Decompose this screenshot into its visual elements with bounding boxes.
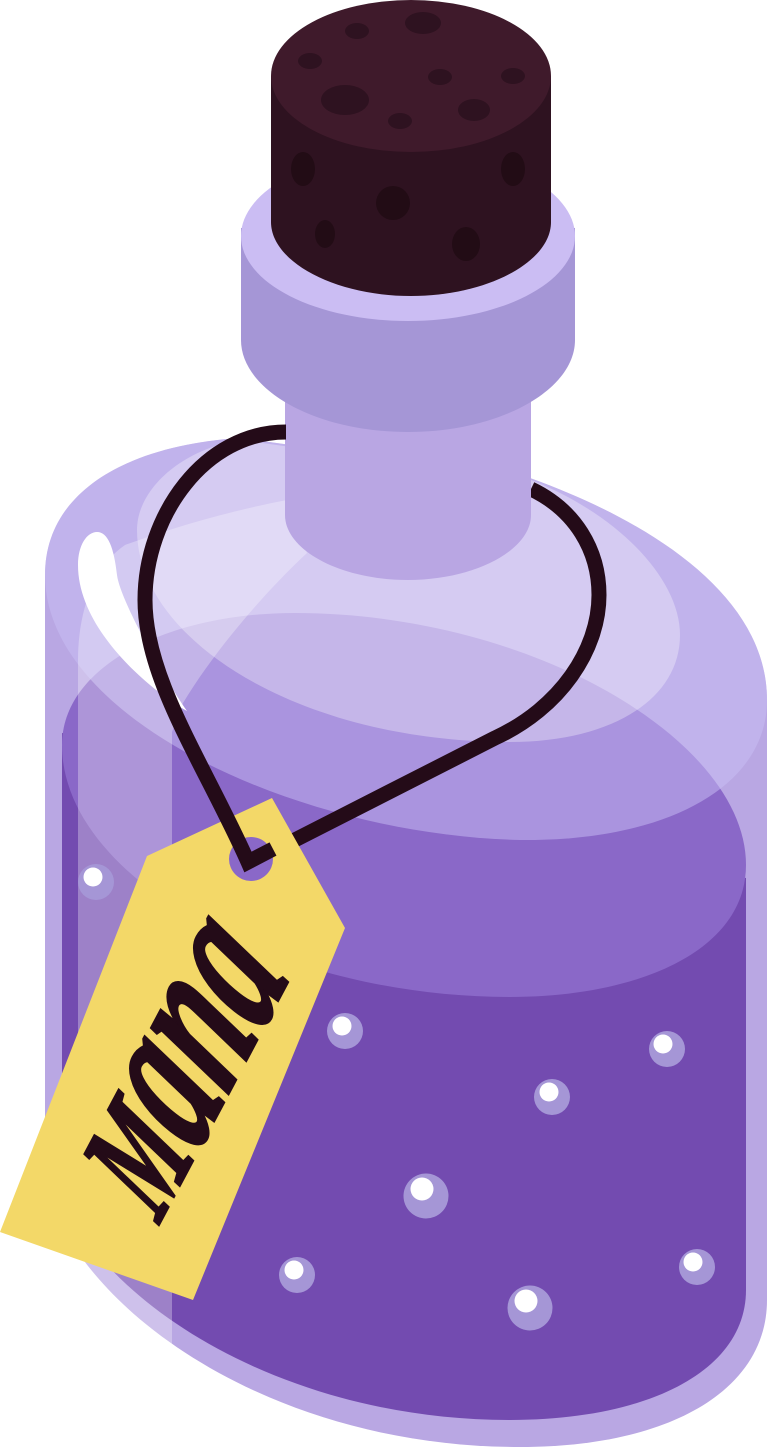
- vertical glass reflection: [78, 500, 307, 1400]
- bottle shoulder top surface: [45, 438, 767, 840]
- bubbles: [78, 864, 715, 1330]
- bottle neck: [285, 390, 531, 580]
- cork stopper: [271, 0, 551, 296]
- liquid surface: [62, 613, 746, 997]
- string: right section behind tag: [285, 489, 599, 845]
- stopper collar: [241, 151, 575, 432]
- inner shoulder highlight: [137, 440, 680, 742]
- tag text: Mana: Mana: [5, 856, 328, 1255]
- string: left section through tag hole: [145, 432, 286, 862]
- white glare: [78, 532, 187, 711]
- liquid body: [62, 733, 746, 1420]
- bottle glass body: [45, 438, 767, 1447]
- label tag: [0, 798, 345, 1300]
